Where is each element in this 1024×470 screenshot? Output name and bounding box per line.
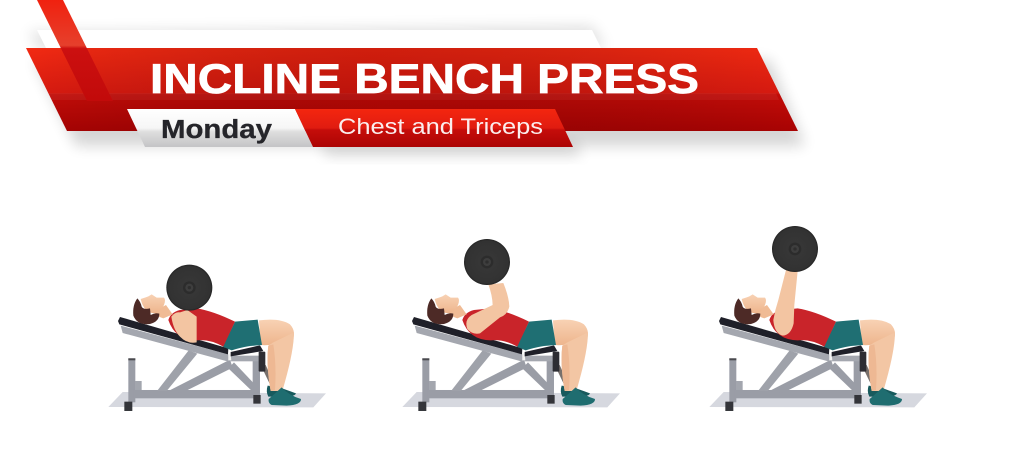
figure 3: arm extended [709, 226, 927, 411]
banner [26, 0, 805, 156]
lowered arm [171, 310, 197, 343]
barbell plate [464, 239, 510, 285]
figure 2: bar halfway [402, 239, 620, 411]
bench [108, 317, 326, 411]
day label: Monday [161, 116, 273, 144]
main red ribbon [26, 48, 798, 131]
day tab [127, 109, 313, 147]
diagonal stripe [37, 0, 113, 101]
muscle label: Chest and Triceps [338, 114, 543, 139]
barbell plate [772, 226, 818, 272]
athlete [734, 294, 902, 406]
barbell plate [166, 265, 212, 311]
white back ribbon [37, 30, 601, 48]
athlete [427, 294, 595, 406]
bench [709, 317, 927, 411]
figure 1: bar lowered to chest [108, 265, 326, 411]
title: INCLINE BENCH PRESS [150, 55, 699, 102]
bench [402, 317, 620, 411]
straight arm [773, 270, 798, 336]
muscle tab [295, 109, 573, 147]
bent arm [466, 283, 509, 334]
athlete [133, 294, 301, 406]
